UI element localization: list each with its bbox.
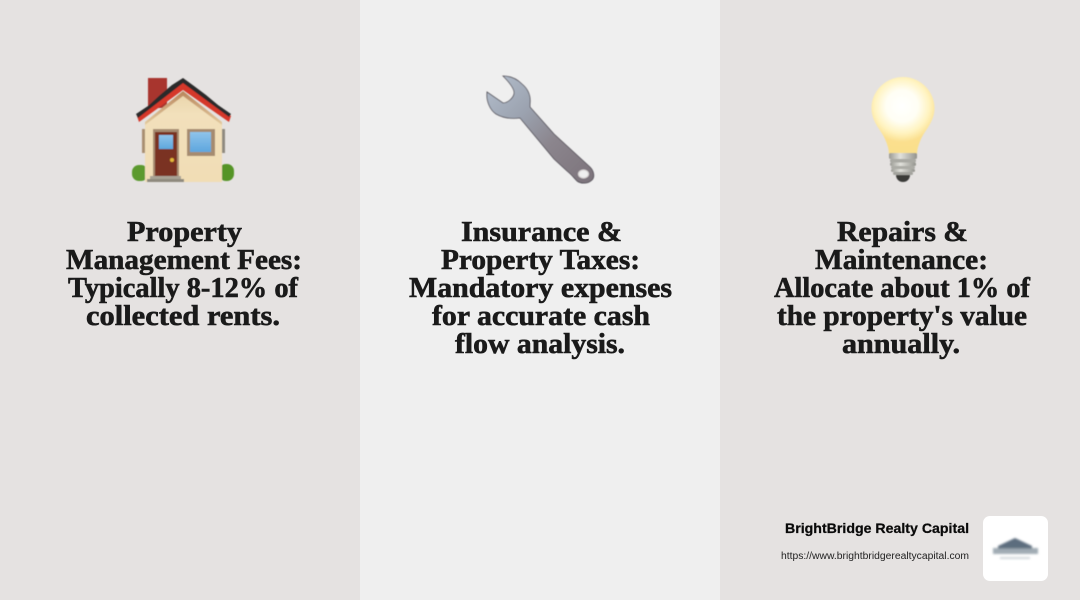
heading: repairs and maintenance: annually.	[842, 328, 960, 360]
icon: wrench	[487, 76, 594, 183]
heading: property management fees	[66, 216, 302, 332]
heading: insurance and property taxes: Property Taxes:	[441, 244, 640, 276]
heading: insurance and property taxes: Mandatory expenses	[409, 272, 672, 304]
brand name: BrightBridge Realty Capital	[785, 520, 969, 536]
website url: https://www.brightbridgerealtycapital.com	[781, 551, 969, 562]
panel: insurance and property taxes	[360, 0, 720, 600]
heading: repairs and maintenance: Maintenance:	[815, 244, 988, 276]
heading: property management fees: Management Fees:	[66, 244, 302, 276]
heading: repairs and maintenance	[774, 216, 1030, 360]
panel: repairs and maintenance	[720, 0, 1080, 600]
heading: repairs and maintenance: Allocate about 1% of	[774, 272, 1030, 304]
heading: repairs and maintenance: Repairs &	[837, 216, 968, 248]
heading: property management fees: collected rents.	[86, 300, 280, 332]
heading: property management fees: Property	[127, 216, 243, 248]
heading: insurance and property taxes: Insurance &	[461, 216, 622, 248]
icon: light bulb	[872, 77, 934, 182]
heading: insurance and property taxes: flow analysis.	[455, 328, 625, 360]
heading: property management fees: Typically 8-12% of	[68, 272, 298, 304]
heading: insurance and property taxes: for accurate cash	[432, 300, 650, 332]
logo card	[983, 516, 1048, 581]
heading: repairs and maintenance: the property's value	[777, 300, 1027, 332]
panel: property management fees	[0, 0, 360, 600]
heading: insurance and property taxes	[409, 216, 672, 360]
icon: house	[132, 78, 234, 182]
